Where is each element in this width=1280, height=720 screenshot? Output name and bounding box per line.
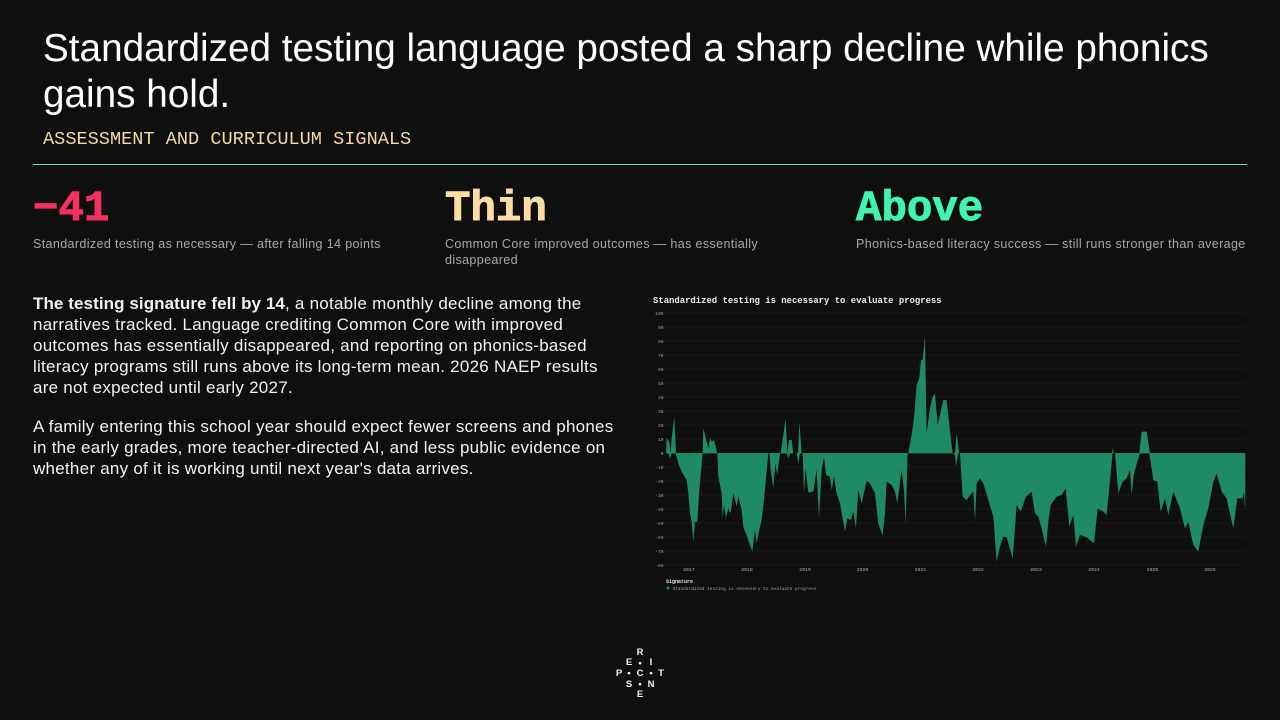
title	[43, 27, 1209, 116]
x axis labels	[683, 567, 1216, 573]
x axis labels: 2017	[683, 567, 695, 573]
y axis labels: 0	[661, 451, 664, 457]
x axis labels: 2019	[799, 567, 811, 573]
y axis labels: 30	[658, 409, 664, 415]
y axis labels: -40	[655, 507, 664, 513]
x axis labels: 2021	[915, 567, 926, 573]
stat value: thin: Thin	[445, 185, 547, 233]
stat card: common core	[445, 185, 758, 267]
x axis labels: 2020	[857, 567, 868, 573]
chart title: Standardized testing is necessary to evaluate progress	[653, 296, 942, 306]
logo: letter cross: •	[649, 668, 653, 679]
body paragraph 1	[33, 294, 598, 397]
y axis labels: 70	[658, 353, 664, 359]
logo: letter cross: •	[638, 679, 642, 690]
y axis labels: 60	[658, 367, 664, 373]
stat card: standardized testing	[33, 185, 381, 251]
subtitle: ASSESSMENT AND CURRICULUM SIGNALS	[43, 129, 411, 150]
body paragraph 1: outcomes has essentially disappeared, and reporting on phonics-based	[33, 336, 587, 355]
body paragraph 2: A family entering this school year should expect fewer screens and phones	[33, 417, 614, 436]
x axis labels: 2025	[1147, 567, 1158, 573]
logo: letter cross: R	[637, 647, 643, 658]
legend: Standardized testing is necessary to evaluate progress	[672, 586, 817, 592]
stat card: phonics	[855, 185, 1246, 251]
title: Standardized testing language posted a sharp decline while phonics	[43, 27, 1209, 70]
logo: letter cross: •	[627, 668, 631, 679]
y axis labels: 20	[658, 423, 664, 429]
x axis labels: 2026	[1204, 567, 1216, 573]
logo: letter cross: N	[648, 679, 654, 690]
y axis labels: -80	[655, 563, 664, 569]
x axis labels: 2024	[1088, 567, 1100, 573]
logo: letter cross: E	[637, 689, 643, 700]
logo: letter cross: C	[637, 668, 643, 679]
y axis labels: 10	[658, 437, 664, 443]
stat caption: Standardized testing as necessary — after falling 14 points	[33, 237, 381, 251]
logo: letter cross: I	[650, 657, 652, 668]
legend: Signature	[666, 579, 693, 585]
body paragraph 1: are not expected until early 2027.	[33, 378, 293, 397]
body paragraph 1: literacy programs still runs above its long-term mean. 2026 NAEP results	[33, 357, 598, 376]
y axis labels: 40	[658, 395, 664, 401]
positive area, left part	[666, 337, 959, 453]
stat value: -41: −41	[33, 185, 109, 233]
grid lines	[665, 313, 1245, 565]
x axis labels: 2023	[1030, 567, 1042, 573]
y axis labels: -10	[655, 465, 664, 471]
logo: letter cross: E	[626, 657, 632, 668]
stat value: above: Above	[856, 185, 983, 233]
y axis labels: -50	[655, 521, 664, 527]
body paragraph 2	[33, 417, 614, 478]
negative area, left part	[666, 453, 958, 552]
body paragraph 2: whether any of it is working until next year's data arrives.	[33, 459, 474, 478]
body paragraph 1: narratives tracked. Language crediting Common Core with improved	[33, 315, 563, 334]
body paragraph 2: in the early grades, more teacher-directed AI, and less public evidence on	[33, 438, 605, 457]
y axis labels: 90	[658, 325, 664, 331]
y axis labels: 50	[658, 381, 664, 387]
title: gains hold.	[43, 73, 230, 116]
negative area, right part	[960, 453, 1245, 562]
x axis labels: 2018	[741, 567, 753, 573]
logo: letter cross: •	[638, 658, 642, 669]
logo: letter cross: T	[658, 668, 664, 679]
y axis labels: -70	[655, 549, 664, 555]
body paragraph 1: The testing signature fell by 14, a notable monthly decline among the	[33, 294, 582, 313]
y axis labels: -20	[655, 479, 664, 485]
stat caption: Phonics-based literacy success — still runs stronger than average	[856, 237, 1246, 251]
x axis labels: 2022	[972, 567, 984, 573]
y axis labels: -60	[655, 535, 664, 541]
positive area, right part	[1112, 432, 1150, 453]
y axis labels	[655, 311, 664, 569]
y axis labels: 80	[658, 339, 664, 345]
y axis labels: 100	[655, 311, 664, 317]
logo: letter cross: P	[616, 668, 622, 679]
y axis labels: -30	[655, 493, 664, 499]
stat caption: Common Core improved outcomes — has essentially disappeared	[445, 237, 758, 267]
legend	[666, 579, 817, 592]
logo: letter cross: S	[626, 679, 632, 690]
logo: letter cross	[616, 647, 664, 700]
